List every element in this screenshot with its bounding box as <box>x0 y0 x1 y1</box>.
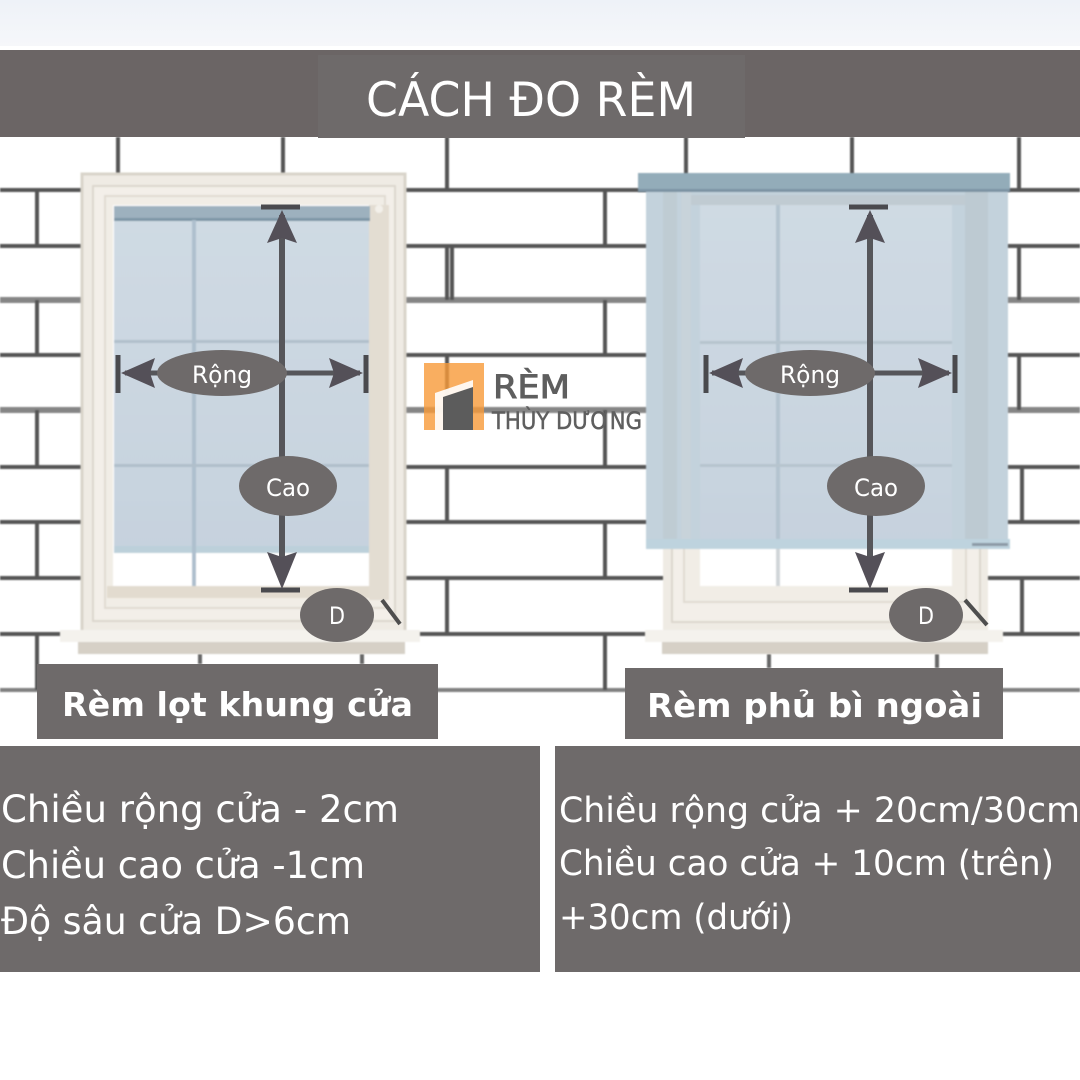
label: D: D <box>329 602 345 630</box>
label: D: D <box>918 602 934 630</box>
label: Cao <box>827 456 925 516</box>
panel: inside-frame measurements: Chiều cao cửa -1cm <box>1 844 365 887</box>
height arrow <box>849 207 888 590</box>
heading: Rèm lọt khung cửa: Rèm lọt khung cửa <box>62 685 413 724</box>
label: D <box>889 588 963 642</box>
left window: roller blind inside frame <box>60 174 420 654</box>
heading: Rèm phủ bì ngoài: Rèm phủ bì ngoài <box>647 686 982 725</box>
depth mark <box>965 600 987 625</box>
label: Rộng: Rộng <box>192 361 252 389</box>
logo: Rèm Thùy Dương: THÙY DƯƠNG <box>491 405 642 435</box>
depth mark <box>382 600 400 624</box>
panel: outside-frame measurements: Chiều cao cửa + 10cm (trên) <box>559 844 1054 884</box>
label: Cao: Cao <box>266 474 310 502</box>
height arrow <box>261 207 300 590</box>
label: Rộng: Rộng <box>780 361 840 389</box>
title <box>318 55 745 138</box>
panel: outside-frame measurements: Chiều rộng cửa + 20cm/30cm <box>559 791 1080 831</box>
panel: inside-frame measurements: Chiều rộng cửa - 2cm <box>1 788 399 831</box>
right window: roller blind outside frame <box>638 173 1010 654</box>
label: Rộng <box>745 350 875 396</box>
width arrow <box>118 355 366 393</box>
title: CÁCH ĐO RÈM <box>366 73 696 128</box>
label: Cao <box>239 456 337 516</box>
logo: Rèm Thùy Dương: RÈM <box>493 368 570 406</box>
label: D <box>300 588 374 642</box>
width arrow <box>706 355 955 393</box>
panel: inside-frame measurements <box>0 746 540 972</box>
heading: Rèm phủ bì ngoài <box>625 668 1003 739</box>
heading: Rèm lọt khung cửa <box>37 664 438 739</box>
panel: inside-frame measurements: Độ sâu cửa D>6cm <box>1 900 351 943</box>
label: Cao: Cao <box>854 474 898 502</box>
label: Rộng <box>157 350 287 396</box>
logo: Rèm Thùy Dương <box>424 363 642 435</box>
icon: orange door <box>424 363 484 430</box>
panel: outside-frame measurements <box>555 746 1080 972</box>
panel: outside-frame measurements: +30cm (dưới) <box>559 898 793 938</box>
header band <box>0 50 1080 138</box>
